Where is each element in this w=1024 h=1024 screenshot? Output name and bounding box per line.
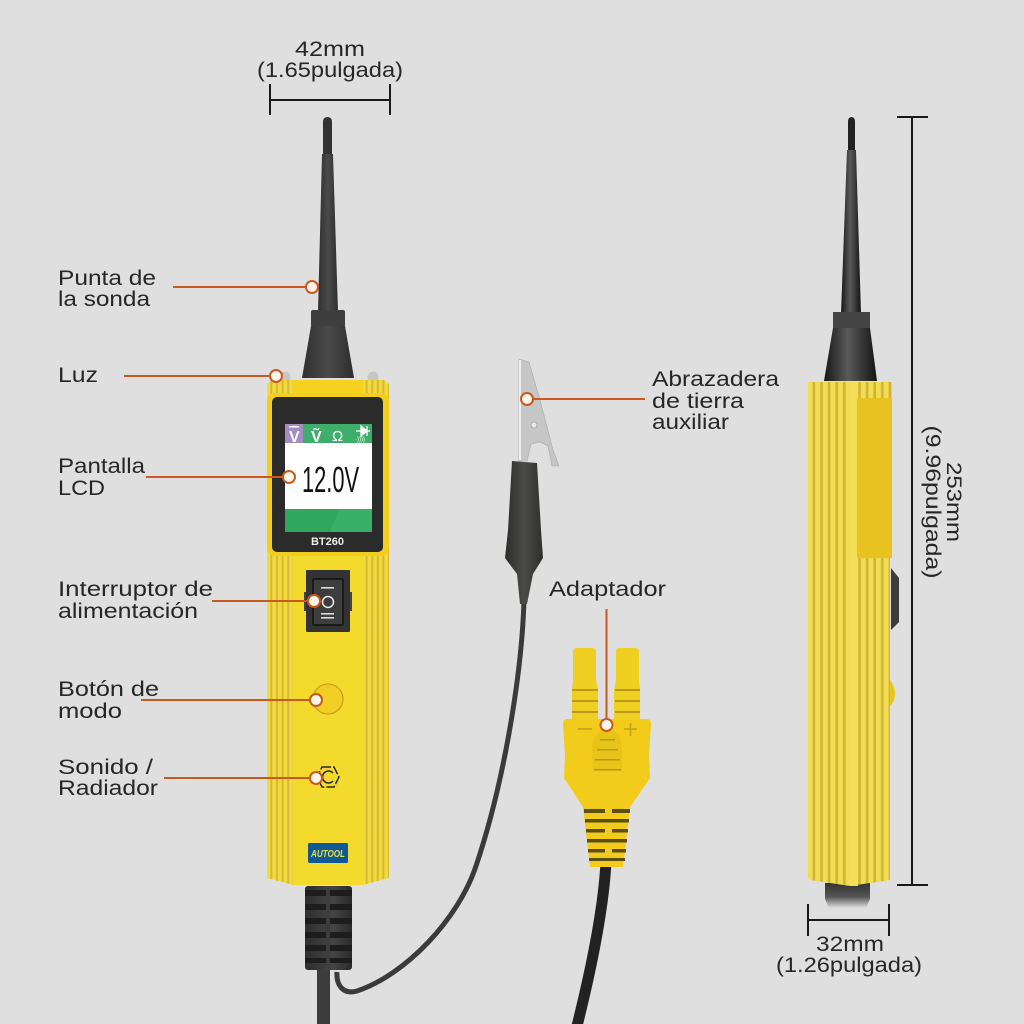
LCD screen [272,397,383,552]
callout: probe tip [58,267,318,311]
dimension: width 42mm [257,38,403,115]
alligator clip [505,359,559,604]
side bottom [825,883,870,908]
side recess [857,398,892,558]
callout: LCD [58,455,295,500]
plug body [563,719,651,867]
callout: ground clamp: de tierra [652,390,744,413]
callout: power switch [58,578,320,623]
callout: buzzer: Radiador [58,777,158,800]
callout: power switch: alimentación [58,600,198,623]
dimension: height 253mm [897,117,965,885]
adapter plug [563,648,651,867]
probe tip [302,117,354,378]
side button [889,679,895,707]
plug grip [578,723,637,771]
callout: power switch: Interruptor de [58,578,213,601]
AUTOOL logo [308,843,348,863]
front view tester [267,117,389,1024]
dimension: width 42mm: 42mm [295,38,365,61]
callout: ground clamp: auxiliar [652,411,729,434]
callout: mode button: modo [58,700,122,723]
yellow body [267,380,389,885]
callout: light [58,364,282,387]
clip boot [505,461,543,604]
callout: adapter: Adaptador [549,578,666,601]
cable: adapter lead [577,862,606,1024]
buzzer icon [317,767,339,787]
callout: ground clamp: Abrazadera [652,368,779,391]
lights [280,372,378,382]
LCD screen: Ω [332,428,343,445]
LCD screen: ·)))) [355,437,365,443]
dimension: depth 32mm: (1.26pulgada) [776,954,922,977]
side view tester [808,117,899,908]
dimension: depth 32mm [776,904,922,977]
dimension: height 253mm: (9.96pulgada) [921,426,944,578]
callout: adapter [549,578,666,731]
LCD screen: V [289,429,300,446]
callout: mode button: Botón de [58,678,159,701]
clip jaws [519,359,559,466]
dimension: depth 32mm: 32mm [816,933,884,956]
callout: buzzer [58,756,322,800]
callout: ground clamp [521,368,779,434]
side body [808,382,892,886]
LCD screen: BT260 [311,536,344,548]
cable: auxiliary ground lead [337,600,524,992]
mode button [313,684,343,714]
callout: buzzer: Sonido / [58,756,153,779]
side probe [824,117,877,381]
LCD screen: Ṽ [311,426,322,446]
power switch [304,570,352,632]
callout: probe tip: la sonda [58,288,150,311]
cable strain relief [305,886,352,1024]
callout: probe tip: Punta de [58,267,156,290]
callout: mode button [58,678,322,723]
dimension: height 253mm: 253mm [942,462,965,542]
plug vents [584,809,630,861]
callout: LCD: LCD [58,477,105,500]
dimension: width 42mm: (1.65pulgada) [257,59,403,82]
callout: light: Luz [58,364,98,387]
LCD screen: 12.0V [302,459,359,500]
side switch [891,568,899,630]
callout: LCD: Pantalla [58,455,145,478]
prongs [572,648,640,720]
AUTOOL logo: AUTOOL [310,849,345,860]
